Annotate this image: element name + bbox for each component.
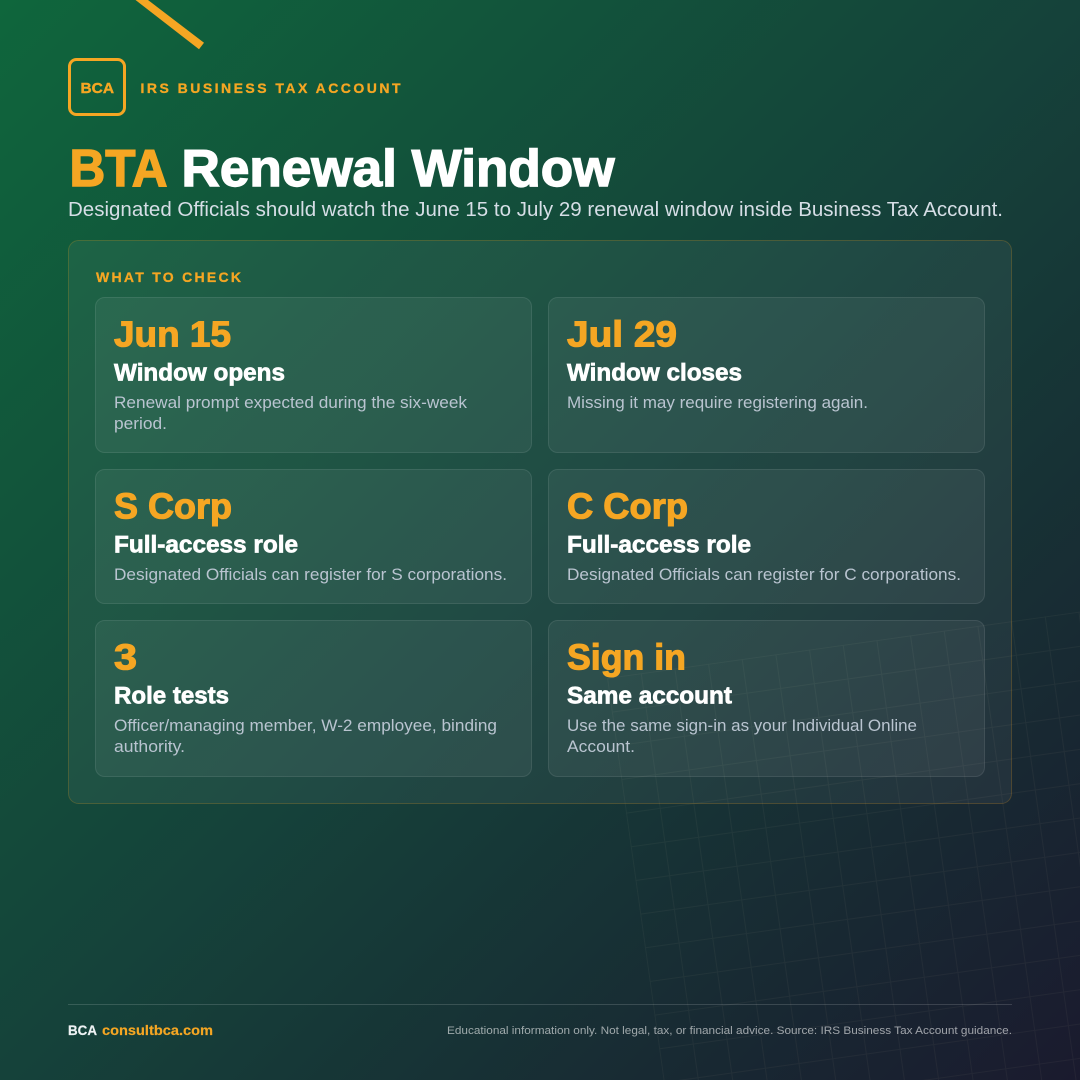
footer website: consultbca.com [102, 1022, 213, 1038]
card: sign in: Same account [567, 682, 732, 710]
card: sign in: Use the same sign-in as your Individual Online [567, 717, 917, 735]
header [70, 60, 401, 114]
card: 3 role tests: Role tests [114, 682, 229, 710]
card: S Corp [96, 470, 532, 604]
logo badge: BCA [80, 80, 114, 97]
card: S Corp: Full-access role [114, 532, 298, 558]
title remainder: Renewal Window [182, 140, 615, 198]
card: Jun 15: period. [114, 415, 167, 433]
card: Jun 15: Window opens [114, 360, 285, 386]
footer brand: BCA [68, 1022, 97, 1038]
disclaimer: Educational information only. Not legal, tax, or financial advice. Source: IRS Business Tax Account guidance. [447, 1025, 1012, 1037]
card: S Corp: S Corp [114, 486, 232, 526]
card: sign in: Sign in [567, 636, 686, 678]
card: 3 role tests: authority. [114, 738, 185, 756]
card: 3 role tests: 3 [114, 636, 137, 678]
eyebrow label: IRS BUSINESS TAX ACCOUNT [140, 80, 401, 96]
card: Jun 15: Renewal prompt expected during the six-week [114, 394, 468, 412]
card: C Corp: C Corp [567, 486, 688, 526]
card: C Corp [548, 470, 984, 604]
logo badge [70, 60, 124, 114]
card: Jul 29: Jul 29 [567, 314, 677, 354]
card: Jun 15: Jun 15 [114, 314, 231, 354]
decorative grid [607, 612, 1080, 1080]
panel heading: WHAT TO CHECK [96, 269, 241, 285]
card: sign in [548, 620, 984, 776]
subtitle: Designated Officials should watch the June 15 to July 29 renewal window inside Business Tax Account. [68, 198, 1003, 221]
card: 3 role tests: Officer/managing member, W-2 employee, binding [114, 717, 497, 735]
footer [68, 1004, 1012, 1038]
title: BTA [70, 140, 168, 198]
card: sign in: Account. [567, 738, 635, 756]
panel: what to check [68, 240, 1012, 804]
card: Jul 29 [548, 298, 984, 452]
card: C Corp: Full-access role [567, 532, 751, 558]
card: S Corp: Designated Officials can register for S corporations. [114, 566, 507, 584]
card: Jul 29: Window closes [567, 360, 742, 386]
card: Jun 15 [96, 298, 532, 452]
card: 3 role tests [96, 620, 532, 776]
card: Jul 29: Missing it may require registering again. [567, 394, 868, 412]
accent bar [136, 0, 204, 49]
card: C Corp: Designated Officials can register for C corporations. [567, 566, 961, 584]
